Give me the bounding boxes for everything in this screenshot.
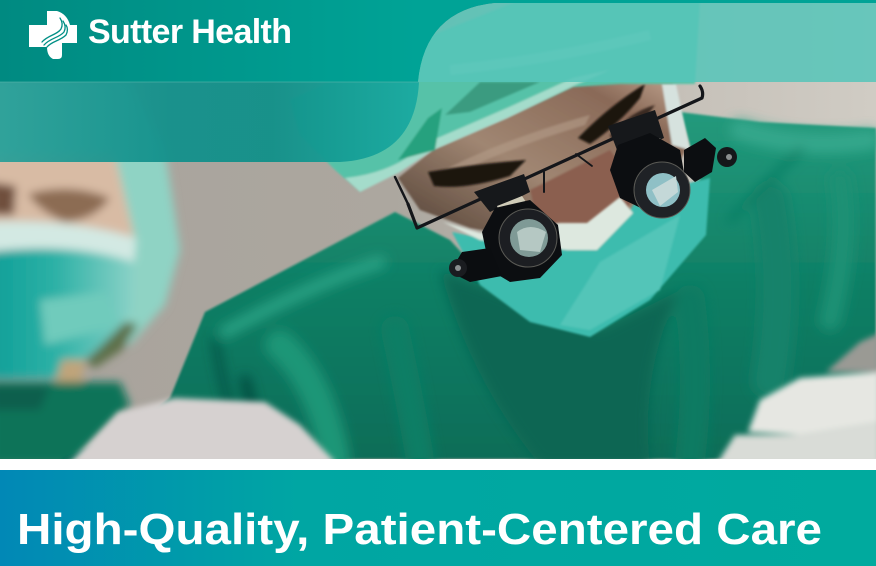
right loupe (610, 133, 737, 218)
band edge line (0, 82, 419, 83)
translucent header panel (418, 3, 876, 82)
logo wordmark: Sutter Health (88, 13, 292, 51)
eyebrows and eye (428, 84, 655, 187)
surgical gloves (68, 333, 876, 465)
surgeon face (398, 82, 691, 232)
loupe frame (395, 86, 703, 228)
logo icon: cross (29, 11, 77, 59)
left loupe (449, 200, 562, 282)
gown folds and shadows (215, 130, 870, 465)
logo stripes (42, 18, 68, 47)
ear strap area (662, 84, 690, 150)
top header band (0, 0, 876, 82)
surgical gown (60, 112, 876, 459)
surgical mask (443, 178, 710, 337)
magnifying loupes (395, 86, 737, 282)
footer band (0, 470, 876, 566)
loupe clips (474, 110, 664, 212)
translucent teal band (0, 82, 419, 162)
assistant in background (0, 162, 184, 459)
surgical cap (290, 0, 700, 192)
logo: Sutter Health (29, 11, 292, 59)
title: High-Quality, Patient-Centered Care (17, 505, 822, 554)
